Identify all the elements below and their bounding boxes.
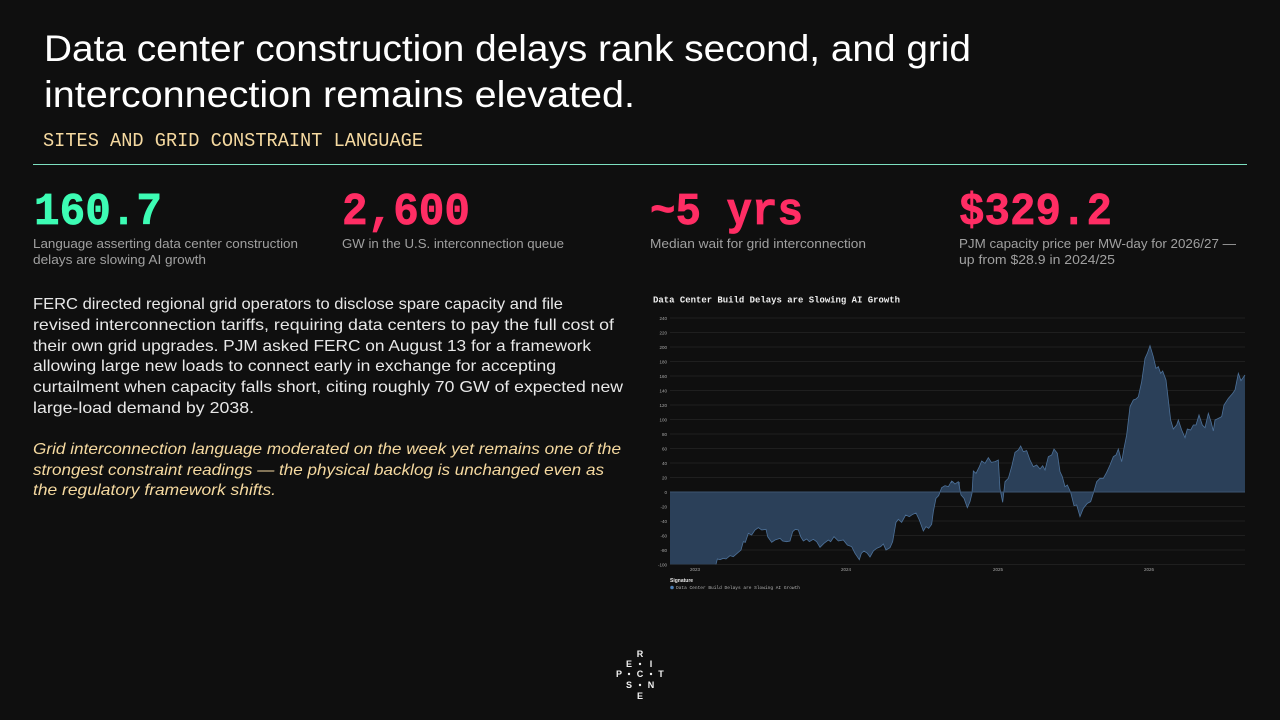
legend <box>670 578 800 591</box>
area series <box>670 481 960 564</box>
y axis labels: 0 <box>664 490 667 495</box>
body paragraph: large-load demand by 2038. <box>33 400 254 417</box>
y axis labels: -40 <box>660 519 667 524</box>
stat: $329.2: $329.2 <box>959 187 1112 238</box>
stat: $329.2 <box>959 187 1237 267</box>
stat: ~5 yrs: ~5 yrs <box>650 187 803 238</box>
body paragraph: allowing large new loads to connect early in exchange for accepting <box>33 358 556 375</box>
logo: T <box>658 669 664 679</box>
y axis labels: 40 <box>662 461 667 466</box>
body paragraph: revised interconnection tariffs, requiring data centers to pay the full cost of <box>33 317 615 334</box>
stat: ~5 yrs <box>650 187 866 251</box>
x axis labels <box>690 567 1155 572</box>
body paragraph: FERC directed regional grid operators to disclose spare capacity and file <box>33 296 563 313</box>
italic commentary: Grid interconnection language moderated on the week yet remains one of the <box>33 441 621 458</box>
logo: I <box>650 659 652 669</box>
title: Data center construction delays rank second, and grid <box>44 28 971 69</box>
y axis labels: 220 <box>659 330 667 336</box>
italic commentary: the regulatory framework shifts. <box>33 482 276 499</box>
stat: $329.2: PJM capacity price per MW-day for 2026/27 — <box>959 237 1237 251</box>
y axis labels: -20 <box>660 504 667 510</box>
y axis labels: 160 <box>659 374 667 379</box>
logo <box>616 649 664 701</box>
y axis labels: 120 <box>659 403 667 408</box>
y axis labels: 80 <box>662 432 667 437</box>
title: interconnection remains elevated. <box>44 74 635 115</box>
title <box>44 28 971 115</box>
logo: P <box>616 669 622 679</box>
italic commentary <box>33 441 621 499</box>
logo: S <box>626 680 632 690</box>
subtitle: SITES AND GRID CONSTRAINT LANGUAGE <box>43 130 423 152</box>
logo: E <box>626 659 632 669</box>
y axis labels: -80 <box>660 548 667 553</box>
y axis labels: 180 <box>659 360 667 364</box>
stat: 160.7: 160.7 <box>34 187 162 238</box>
y axis labels: 100 <box>659 418 667 422</box>
stat: 2,600: 2,600 <box>342 187 470 238</box>
body paragraph: curtailment when capacity falls short, citing roughly 70 GW of expected new <box>33 379 623 396</box>
y axis labels: 240 <box>659 316 667 321</box>
logo: N <box>648 680 654 690</box>
stat: 160.7: Language asserting data center construction <box>33 237 298 251</box>
italic commentary: strongest constraint readings — the physical backlog is unchanged even as <box>33 462 604 479</box>
stat: 160.7: delays are slowing AI growth <box>33 253 206 267</box>
y axis labels: 20 <box>662 476 667 480</box>
y axis labels <box>658 316 667 568</box>
stat: $329.2: up from $28.9 in 2024/25 <box>959 253 1115 267</box>
logo: R <box>637 649 644 659</box>
y axis labels: 140 <box>659 388 667 394</box>
body paragraph <box>33 296 623 417</box>
y axis labels: -60 <box>660 534 667 538</box>
logo: E <box>637 691 643 701</box>
y axis labels: 200 <box>659 345 667 350</box>
logo: C <box>637 669 644 679</box>
chart title: Data Center Build Delays are Slowing AI Growth <box>653 296 900 306</box>
legend: Data Center Build Delays are Slowing AI Growth <box>676 585 800 591</box>
body paragraph: their own grid upgrades. PJM asked FERC on August 13 for a framework <box>33 338 592 355</box>
legend: Signature <box>670 578 693 584</box>
stat: 2,600: GW in the U.S. interconnection queue <box>342 237 564 251</box>
x axis labels: 2024 <box>841 567 852 572</box>
y axis labels: -100 <box>658 562 667 568</box>
stat: 2,600 <box>342 187 564 251</box>
chart: build delays signature <box>653 296 1245 591</box>
y axis labels: 60 <box>662 446 667 452</box>
x axis labels: 2025 <box>993 567 1004 572</box>
stat: 160.7 <box>33 187 298 267</box>
stat: ~5 yrs: Median wait for grid interconnection <box>650 237 866 251</box>
x axis labels: 2023 <box>690 567 701 572</box>
x axis labels: 2026 <box>1144 567 1155 572</box>
